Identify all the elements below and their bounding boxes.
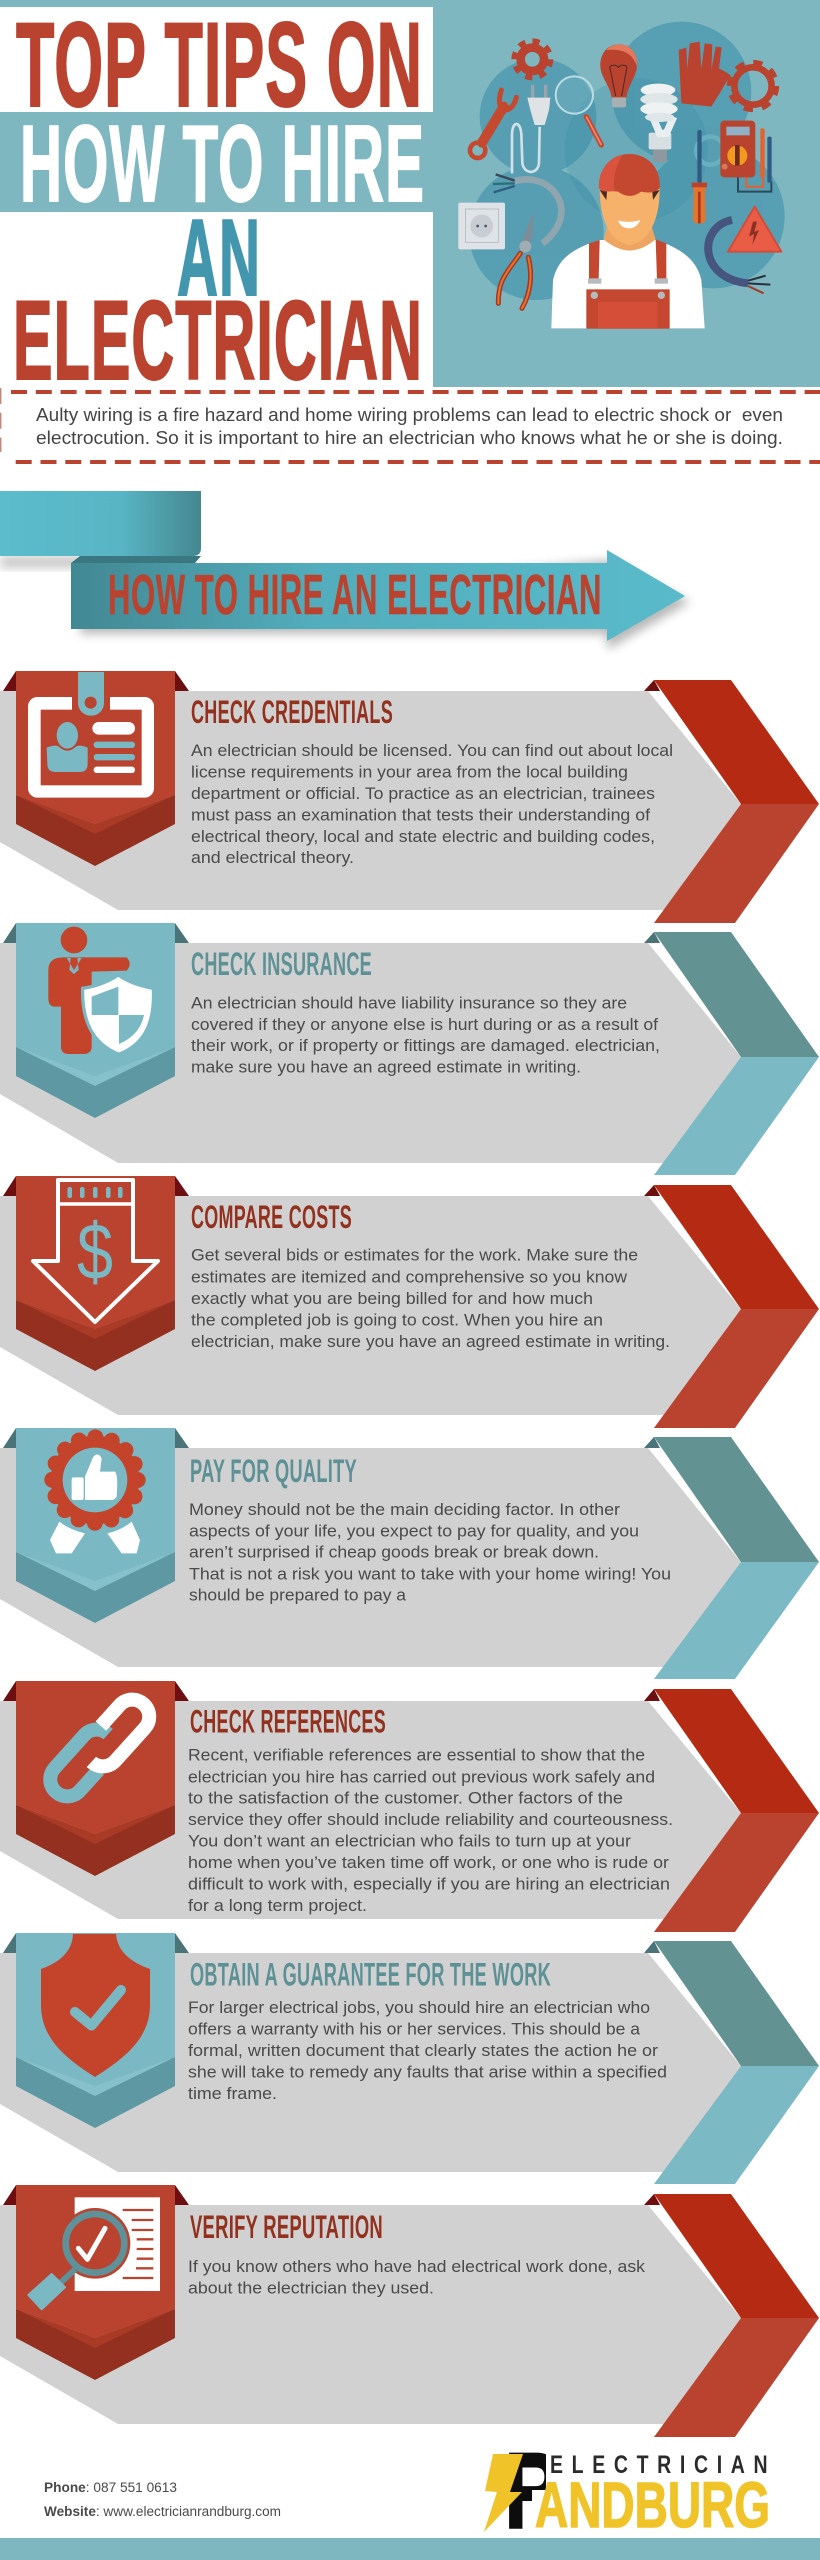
banner arrow	[71, 550, 685, 641]
body text: Money should not be the main deciding factor. In other	[189, 1500, 620, 1519]
icon: glove	[679, 42, 730, 107]
logo: electrician randburg: R	[505, 2432, 561, 2550]
body text: home when you’ve taken time off work, or one who is rude or	[188, 1853, 669, 1872]
body text	[191, 993, 660, 1077]
icon: light bulb	[600, 44, 637, 107]
icon: magnifier over document	[28, 2197, 160, 2309]
body text	[189, 1500, 671, 1605]
body text: license requirements in your area from the local building	[191, 763, 628, 782]
panel: check insurance	[0, 923, 819, 1175]
banner upper band	[0, 491, 201, 556]
panel: check references	[0, 1681, 819, 1932]
footer band	[0, 2538, 820, 2560]
body text	[188, 2257, 646, 2298]
body text: service they offer should include reliability and courteousness.	[188, 1810, 673, 1829]
panel: compare costs	[0, 1176, 819, 1428]
contact details: Website: www.electricianrandburg.com	[44, 2504, 281, 2519]
body text: should be prepared to pay a	[189, 1586, 407, 1605]
panel: pay for quality	[0, 1428, 819, 1679]
logo: electrician randburg	[484, 2452, 768, 2532]
intro line 1: Aulty wiring is a fire hazard and home wiring problems can lead to electric shock or even	[36, 405, 783, 425]
intro line 2: electrocution. So it is important to hire an electrician who knows what he or she is doing.	[36, 428, 783, 448]
gray card	[0, 1448, 741, 1667]
body text: make sure you have an agreed estimate in writing.	[191, 1058, 581, 1077]
icon: magnifying glass	[556, 76, 601, 145]
body text	[188, 1746, 673, 1915]
icon: plug and cable	[512, 85, 550, 173]
ribbon badge	[3, 1176, 189, 1371]
gray card	[0, 943, 741, 1163]
ribbon badge	[3, 2185, 189, 2380]
title line: AN: AN	[177, 197, 261, 319]
icon: blue cable	[708, 220, 770, 293]
body text: Recent, verifiable references are essential to show that the	[188, 1746, 645, 1765]
body text	[191, 1246, 670, 1351]
heading: CHECK INSURANCE	[191, 946, 372, 982]
heading: COMPARE COSTS	[191, 1199, 352, 1235]
title line: TOP TIPS ON: TOP TIPS ON	[16, 0, 423, 132]
panel: verify reputation	[0, 2185, 819, 2437]
body text: electrician you hire has carried out previous work safely and	[188, 1767, 655, 1786]
body text: for a long term project.	[188, 1896, 367, 1915]
heading: OBTAIN A GUARANTEE FOR THE WORK	[190, 1956, 551, 1992]
icon: multimeter	[720, 121, 772, 192]
body text: electrician, make sure you have an agreed estimate in writing.	[191, 1332, 670, 1351]
body text: department or official. To practice as an electrician, trainees	[191, 784, 655, 803]
icon: chain links	[43, 1693, 156, 1803]
heading: PAY FOR QUALITY	[190, 1453, 357, 1489]
ribbon badge	[3, 1428, 189, 1623]
body text: covered if they or anyone else is hurt during or as a result of	[191, 1015, 658, 1034]
body text: formal, written document that clearly states the action he or	[188, 2041, 658, 2060]
icon: dollar arrow down	[33, 1180, 158, 1322]
body text: difficult to work with, especially if you are hiring an electrician	[188, 1874, 670, 1893]
banner fold	[71, 556, 201, 563]
icon: dollar arrow down: $	[77, 1207, 113, 1296]
body text: offers a warranty with his or her services. This should be a	[188, 2020, 641, 2038]
body text: You don’t want an electrician who fails to turn up at your	[188, 1832, 631, 1851]
gray card	[0, 1196, 741, 1415]
icon: spiral bulb	[640, 84, 678, 162]
title line: HOW TO HIRE: HOW TO HIRE	[20, 103, 425, 225]
ribbon badge	[3, 671, 189, 866]
icon: large gear	[729, 62, 777, 110]
gray card	[0, 2205, 741, 2424]
body text: Get several bids or estimates for the work. Make sure the	[191, 1246, 638, 1265]
ribbon badge	[3, 1933, 189, 2128]
gray card	[0, 1953, 741, 2172]
panel: intro text	[1, 388, 820, 462]
body text: their work, or if property or fittings are damaged. electrician,	[191, 1036, 660, 1055]
contact details	[44, 2480, 281, 2519]
body text: An electrician should have liability insurance so they are	[191, 993, 627, 1012]
body text: the completed job is going to cost. When you hire an	[191, 1310, 603, 1329]
heading: CHECK REFERENCES	[190, 1704, 386, 1740]
icon: person with shield	[48, 927, 154, 1054]
icon: small gear	[514, 41, 550, 77]
icon: screwdriver	[692, 130, 724, 223]
heading: VERIFY REPUTATION	[190, 2209, 383, 2245]
chevron	[644, 680, 819, 923]
body text: must pass an examination that tests their understanding of	[191, 806, 650, 825]
body text: aren’t surprised if cheap goods break or break down.	[189, 1543, 599, 1562]
chevron	[644, 1437, 819, 1679]
body text: If you know others who have had electrical work done, ask	[188, 2257, 646, 2276]
body text: An electrician should be licensed. You can find out about local	[191, 741, 673, 760]
body text: electrical theory, local and state electric and building codes,	[191, 827, 655, 846]
panel: obtain a guarantee	[0, 1933, 819, 2184]
icon: id badge	[28, 672, 154, 798]
chevron	[644, 2194, 819, 2437]
figure: electrician	[551, 154, 705, 329]
icon: rosette thumbs up	[50, 1436, 140, 1553]
panel: check credentials	[0, 671, 819, 923]
icon: lightning bolt	[484, 2454, 523, 2532]
body text: about the electrician they used.	[188, 2279, 434, 2298]
banner: how to hire an electrician	[0, 491, 690, 650]
body text: and electrical theory.	[191, 848, 354, 867]
gray card	[0, 691, 741, 910]
body text: to the satisfaction of the customer. Other factors of the	[188, 1789, 623, 1808]
contact details: Phone: 087 551 0613	[44, 2480, 177, 2495]
icon: gray cable	[493, 174, 561, 243]
logo: electrician randburg: ELECTRICIAN	[550, 2451, 768, 2479]
body text	[188, 1998, 667, 2103]
body text: aspects of your life, you expect to pay for quality, and you	[189, 1521, 639, 1540]
body text: time frame.	[188, 2084, 277, 2103]
body text	[191, 741, 673, 867]
icon: pliers	[498, 212, 534, 308]
title line: ELECTRICIAN: ELECTRICIAN	[13, 278, 423, 403]
heading: CHECK CREDENTIALS	[191, 694, 393, 730]
ribbon badge	[3, 1681, 189, 1876]
illustration: electrician with tools	[458, 22, 785, 329]
gray card	[0, 1701, 741, 1919]
title panel white bottom	[0, 212, 433, 387]
icon: wall socket	[458, 203, 505, 249]
icon: wrench	[470, 90, 516, 158]
chevron	[644, 1689, 819, 1932]
title panel white top	[0, 7, 433, 112]
chevron	[644, 1185, 819, 1428]
panel: header	[0, 0, 820, 403]
body text: That is not a risk you want to take with your home wiring! You	[189, 1564, 671, 1583]
ribbon badge	[3, 923, 189, 1118]
chevron	[644, 932, 819, 1175]
body text: exactly what you are being billed for and how much	[191, 1289, 593, 1308]
icon: shield with check	[41, 1934, 150, 2077]
icon: warning triangle	[728, 207, 781, 252]
body text: For larger electrical jobs, you should hire an electrician who	[188, 1998, 650, 2017]
chevron	[644, 1941, 819, 2184]
body text: she will take to remedy any faults that arise within a specified	[188, 2062, 667, 2082]
body text: estimates are itemized and comprehensive so you know	[191, 1267, 628, 1286]
